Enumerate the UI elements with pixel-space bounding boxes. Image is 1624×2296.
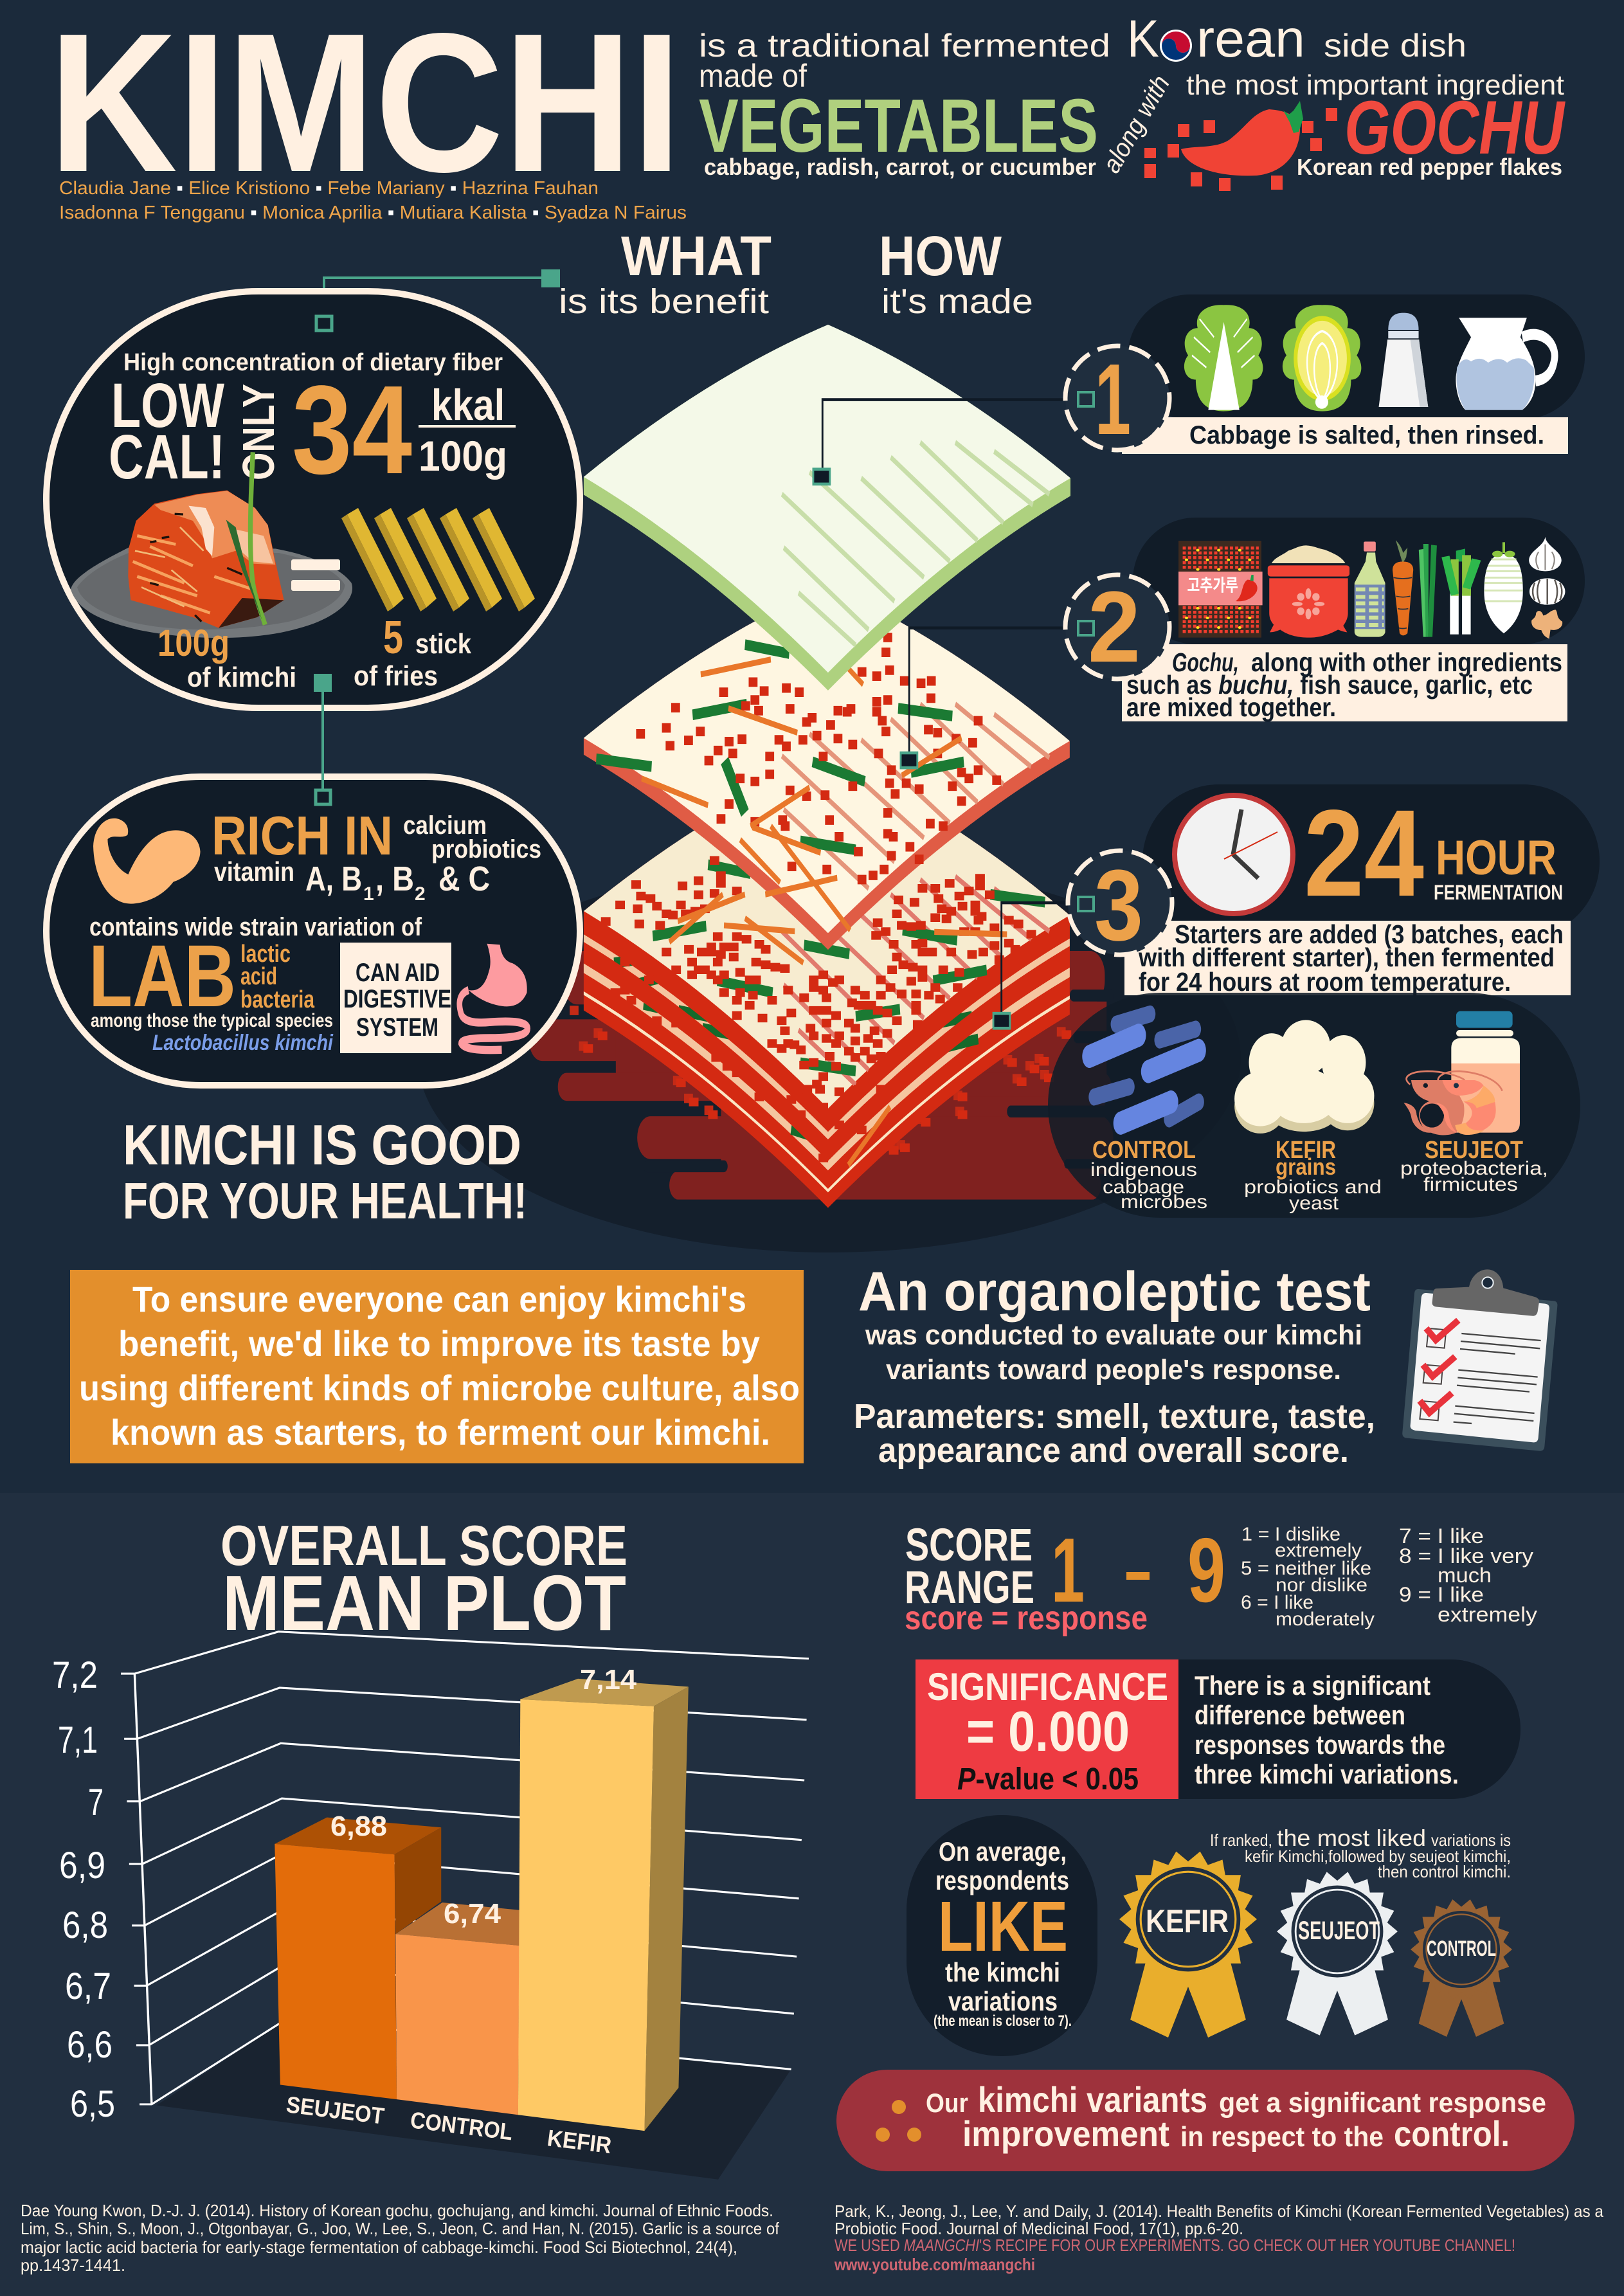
- 5 stick of fries: of fries: [354, 660, 438, 692]
- references right: WE USED MAANGCHI'S RECIPE FOR OUR EXPERIMENTS. GO CHECK OUT HER YOUTUBE CHANNEL!: [835, 2236, 1515, 2255]
- decorative dots icon: [876, 2100, 921, 2142]
- step 1 badge: [1065, 343, 1169, 456]
- icon: control microbes: [1089, 1014, 1199, 1123]
- ranking text: the most liked: [1277, 1825, 1426, 1851]
- score legend: extremely: [1275, 1540, 1362, 1561]
- icon: cabbage cross-section: [1283, 305, 1361, 411]
- authors: [59, 178, 687, 223]
- rich in heading: RICH IN: [212, 806, 393, 867]
- fiber text: High concentration of dietary fiber: [123, 349, 503, 376]
- y axis labels: 6,6: [67, 2024, 113, 2066]
- icon: leeks: [1441, 548, 1481, 635]
- score legend: extremely: [1438, 1603, 1537, 1626]
- step 2 caption: [1122, 644, 1567, 722]
- score legend: nor dislike: [1276, 1575, 1367, 1596]
- strain text: contains wide strain variation of: [89, 913, 422, 941]
- lactic acid bacteria: lactic: [240, 941, 291, 968]
- connector: layer 2 to step 2: [901, 628, 1077, 768]
- panel: like oval: On average,: [939, 1836, 1067, 1867]
- digestive callout: CAN AID: [356, 959, 440, 987]
- layer 3: fermented stack: [583, 759, 1071, 1208]
- seujeot label: SEUJEOT: [1425, 1137, 1523, 1164]
- badge: kefir: KEFIR: [1146, 1903, 1229, 1939]
- 100g of kimchi: 100g: [158, 622, 230, 664]
- vitamins: A, B: [305, 860, 362, 898]
- references left: Dae Young Kwon, D.-J. J. (2014). History of Korean gochu, gochujang, and kimchi. Journal of Ethnic Foods.: [21, 2201, 773, 2220]
- step 1 caption: [1122, 417, 1568, 454]
- kkal per 100g: [419, 381, 516, 480]
- kkal per 100g: 100g: [419, 432, 507, 480]
- conclusion banner: in respect to the: [1180, 2121, 1384, 2153]
- calcium probiotics: probiotics: [431, 835, 541, 863]
- isometric kimchi layers: [529, 325, 1119, 1208]
- ranking text: then control kimchi.: [1378, 1862, 1511, 1881]
- references right: www.youtube.com/maangchi: [834, 2255, 1035, 2274]
- panel: significance: = 0.000: [966, 1699, 1130, 1763]
- score range: SCORE: [905, 1520, 1033, 1571]
- seujeot label: proteobacteria,: [1400, 1158, 1548, 1179]
- calcium probiotics: calcium: [403, 811, 487, 840]
- y axis labels: 7,1: [58, 1719, 98, 1761]
- step 2 caption: such as buchu, fish sauce, garlic, etc: [1126, 670, 1533, 700]
- references left: pp.1437-1441.: [21, 2255, 125, 2275]
- control label: cabbage: [1103, 1177, 1184, 1198]
- hour label: HOUR: [1436, 831, 1556, 885]
- orange callout: benefit, we'd like to improve its taste by: [118, 1323, 760, 1364]
- 24 figure: 24: [1304, 784, 1424, 922]
- orange callout: using different kinds of microbe culture, also: [79, 1368, 800, 1408]
- gochu description: Korean red pepper flakes: [1297, 154, 1562, 180]
- panel: significance: responses towards the: [1195, 1730, 1445, 1760]
- category labels: KEFIR: [546, 2124, 613, 2158]
- LAB heading: LAB: [89, 927, 236, 1026]
- step 2 icons: [1178, 537, 1565, 638]
- typical species: [91, 1010, 334, 1055]
- step 3 badge: 3: [1094, 849, 1143, 962]
- conclusion banner: kimchi variants: [978, 2079, 1207, 2120]
- vitamins: 1: [363, 883, 374, 905]
- score legend: 8 = I like very: [1399, 1544, 1533, 1568]
- seujeot label: firmicutes: [1423, 1174, 1518, 1195]
- icon: gochu chili: [1144, 101, 1337, 191]
- orange callout: To ensure everyone can enjoy kimchi's: [132, 1279, 746, 1319]
- score legend: 6 = I like: [1241, 1592, 1313, 1613]
- panel: rich in: [46, 777, 580, 1085]
- intro text block: made of: [699, 58, 807, 94]
- chart floor: [157, 2019, 790, 2180]
- score range: 9: [1187, 1519, 1225, 1622]
- 34 figure: 34: [292, 359, 412, 500]
- along with: along with: [1097, 71, 1175, 177]
- badge: seujeot: [1277, 1872, 1398, 2036]
- layer 1: cabbage: [584, 325, 1070, 691]
- background: top section: [0, 0, 1624, 1493]
- orange callout: [70, 1270, 804, 1463]
- bar: seujeot: [275, 1818, 441, 2099]
- layer 2: gochu paste: [584, 586, 1070, 950]
- ground shadow: [418, 863, 1241, 1252]
- icon: clock: [1175, 795, 1293, 914]
- ranking text: If ranked,: [1210, 1830, 1272, 1850]
- score legend: 5 = neither like: [1241, 1558, 1371, 1579]
- intro text block: side dish: [1324, 28, 1466, 64]
- score range: score = response: [905, 1600, 1148, 1637]
- 5 stick of fries: 5: [383, 612, 403, 664]
- value labels: 7,14: [580, 1664, 637, 1695]
- badge: seujeot: SEUJEOT: [1298, 1917, 1380, 1945]
- lactic acid bacteria: [240, 941, 315, 1013]
- seujeot label: [1400, 1137, 1548, 1195]
- 100g of kimchi: [158, 622, 296, 693]
- authors: Claudia Jane ▪ Elice Kristiono ▪ Febe Mariany ▪ Hazrina Fauhan: [59, 178, 599, 199]
- icon: seujeot jar with shrimp: [1403, 1011, 1520, 1135]
- step 1 pill: [1065, 294, 1585, 456]
- icon: chives: [1419, 544, 1437, 637]
- 3D bar chart: [52, 1632, 809, 2180]
- intro text block: rean: [1196, 10, 1305, 68]
- panel: significance: There is a significant: [1195, 1670, 1430, 1701]
- low cal heading: LOW: [111, 370, 224, 440]
- value labels: 6,88: [330, 1811, 387, 1842]
- digestive callout: [340, 943, 451, 1053]
- step 2 caption: along with other ingredients: [1251, 647, 1562, 677]
- score range: 1: [1051, 1519, 1085, 1622]
- score range: [905, 1519, 1225, 1637]
- image: kimchi on plate: [71, 452, 352, 638]
- heading: gochu: GOCHU: [1344, 86, 1565, 170]
- conclusion banner: Our: [926, 2088, 968, 2118]
- score legend: 1 = I dislike: [1241, 1524, 1340, 1545]
- kkal per 100g: kkal: [431, 381, 505, 429]
- y axis labels: 7,2: [52, 1654, 98, 1696]
- panel: like oval: respondents: [935, 1865, 1069, 1895]
- heading: what: WHAT: [621, 225, 771, 287]
- ranking text: variations is: [1431, 1830, 1511, 1850]
- organoleptic test text: [854, 1261, 1375, 1470]
- heading: how: it's made: [881, 282, 1033, 321]
- references right: [834, 2201, 1604, 2274]
- orange callout: known as starters, to ferment our kimchi.: [111, 1412, 770, 1452]
- badge: kefir: [1119, 1852, 1257, 2038]
- icon: gochugaru package: 고추가루: [1187, 576, 1238, 595]
- step 3 caption: Starters are added (3 batches, each: [1175, 919, 1564, 949]
- vitamins: & C: [438, 860, 490, 898]
- sauce blob: [529, 951, 1114, 1200]
- conclusion banner: [836, 2070, 1574, 2171]
- category labels: [285, 2091, 613, 2158]
- icon: kefir grains: [1234, 1020, 1374, 1134]
- icon: fish sauce bottle: [1355, 541, 1385, 637]
- low cal heading: [109, 370, 225, 492]
- bar: kefir: [518, 1679, 689, 2131]
- y axis labels: 6,5: [70, 2083, 115, 2125]
- heading: how: HOW: [879, 225, 1002, 287]
- conclusion banner: improvement: [962, 2113, 1169, 2154]
- sauce gaps: [644, 990, 1119, 1172]
- equals sign: [291, 559, 340, 591]
- vitamins: , B: [375, 860, 414, 898]
- icon: radish: [1484, 542, 1523, 633]
- category labels: SEUJEOT: [285, 2091, 386, 2129]
- conclusion banner: get a significant response: [1219, 2087, 1546, 2119]
- panel: like oval: LIKE: [938, 1887, 1068, 1966]
- connector: layer 3 to step 3: [993, 903, 1077, 1028]
- icon: gochugaru package: [1178, 541, 1263, 638]
- step 1 icons: [1184, 305, 1555, 411]
- step 1 badge: 1: [1095, 343, 1131, 456]
- score legend: much: [1438, 1564, 1492, 1587]
- only label: ONLY: [233, 384, 284, 480]
- step 2 caption: are mixed together.: [1126, 692, 1336, 722]
- panel: like oval: the kimchi: [945, 1957, 1060, 1987]
- typical species: among those the typical species: [91, 1010, 333, 1031]
- icon: carrot: [1393, 540, 1413, 635]
- typical species: Lactobacillus kimchi: [152, 1031, 334, 1055]
- health statement: KIMCHI IS GOOD: [123, 1113, 521, 1177]
- score legend: 9 = I like: [1399, 1583, 1484, 1606]
- heading: what: is its benefit: [559, 282, 769, 321]
- organoleptic test text: appearance and overall score.: [878, 1431, 1349, 1470]
- icon: clipboard: [1402, 1269, 1557, 1451]
- score range: RANGE: [905, 1562, 1034, 1613]
- 5 stick of fries: stick: [415, 628, 471, 660]
- connector marker: [316, 790, 330, 804]
- conclusion banner: control.: [1394, 2113, 1510, 2154]
- chart heading: OVERALL SCORE: [221, 1514, 627, 1577]
- icon: muscle arm: [93, 818, 201, 904]
- red gochu flakes: [583, 856, 1071, 1162]
- y axis labels: 7: [88, 1782, 104, 1823]
- references right: Probiotic Food. Journal of Medicinal Food, 17(1), pp.6-20.: [835, 2219, 1243, 2238]
- 100g of kimchi: of kimchi: [187, 662, 296, 693]
- heading: vegetables: VEGETABLES: [699, 84, 1098, 168]
- organoleptic test text: An organoleptic test: [858, 1261, 1371, 1323]
- fermentation label: FERMENTATION: [1434, 881, 1563, 904]
- y axis labels: 6,8: [62, 1904, 108, 1946]
- intro text block: [699, 10, 1466, 94]
- kefir label: yeast: [1289, 1193, 1339, 1214]
- vitamins: 2: [415, 883, 426, 905]
- connector: what to low cal panel: [324, 269, 560, 316]
- panel: like oval: variations: [948, 1986, 1058, 2016]
- sauce flecks: [570, 1006, 1066, 1151]
- heading: what: [559, 225, 771, 321]
- icon: fries: [341, 508, 535, 611]
- control label: microbes: [1121, 1191, 1207, 1213]
- control label: [1090, 1137, 1207, 1213]
- kefir label: probiotics and: [1244, 1177, 1382, 1198]
- gridlines: [121, 1632, 809, 2104]
- panel: starters: [1048, 993, 1580, 1218]
- digestive callout: SYSTEM: [356, 1013, 438, 1042]
- badge: control: [1411, 1899, 1512, 2037]
- step 1 caption: Cabbage is salted, then rinsed.: [1189, 421, 1544, 449]
- vegetables list: cabbage, radish, carrot, or cucumber: [704, 154, 1096, 180]
- panel: significance: SIGNIFICANCE: [927, 1665, 1168, 1708]
- step 2 badge: 2: [1088, 571, 1141, 683]
- intro text block: is a traditional fermented: [699, 28, 1110, 64]
- icon: salt shaker: [1379, 313, 1428, 407]
- connector marker: [316, 316, 332, 330]
- kefir label: grains: [1276, 1153, 1336, 1180]
- references left: [21, 2201, 780, 2275]
- connector: low cal to rich in: [314, 674, 332, 790]
- step 3 badge: [1068, 849, 1172, 962]
- chart heading: MEAN PLOT: [222, 1559, 626, 1647]
- process steps: [1065, 294, 1600, 997]
- bar: control: [395, 1903, 519, 2115]
- panel: significance: three kimchi variations.: [1195, 1759, 1459, 1789]
- icon: stomach: [460, 944, 528, 1050]
- vitamins: vitamin: [214, 856, 294, 887]
- 5 stick of fries: [354, 612, 471, 692]
- kefir label: [1244, 1137, 1382, 1214]
- kefir label: KEFIR: [1276, 1137, 1336, 1164]
- step 2 badge: [1065, 571, 1169, 683]
- authors: Isadonna F Tengganu ▪ Monica Aprilia ▪ Mutiara Kalista ▪ Syadza N Fairus: [59, 203, 687, 223]
- step 3 caption: [1124, 919, 1571, 997]
- lactic acid bacteria: acid: [240, 963, 277, 990]
- control label: indigenous: [1090, 1159, 1197, 1180]
- ranking text: kefir Kimchi,followed by seujeot kimchi,: [1245, 1847, 1511, 1866]
- panel: significance: [916, 1659, 1520, 1799]
- y axis labels: [52, 1654, 115, 2125]
- value labels: 6,74: [444, 1898, 501, 1930]
- step 3 pill: [1068, 784, 1600, 997]
- icon: korean flag circle: [1160, 30, 1192, 62]
- heading: how: [879, 225, 1033, 321]
- health statement: FOR YOUR HEALTH!: [123, 1172, 527, 1229]
- icon: water pitcher: [1456, 318, 1555, 410]
- y axis labels: 6,9: [59, 1845, 105, 1886]
- chart heading: [221, 1514, 627, 1647]
- organoleptic test text: was conducted to evaluate our kimchi: [865, 1319, 1362, 1351]
- icon: seasoning bowl: [1268, 545, 1349, 638]
- step 3 caption: for 24 hours at room temperature.: [1139, 967, 1511, 997]
- step 3 caption: with different starter), then fermented: [1138, 943, 1555, 972]
- y axis labels: 6,7: [65, 1966, 111, 2007]
- panel: low calorie: [46, 291, 580, 708]
- low cal heading: CAL!: [109, 422, 225, 492]
- intro text block: K: [1127, 10, 1159, 68]
- step 2 caption: Gochu,: [1172, 647, 1239, 677]
- health statement: [123, 1113, 527, 1229]
- badge: control: CONTROL: [1427, 1937, 1496, 1961]
- score legend: 7 = I like: [1399, 1524, 1484, 1548]
- vitamins: [214, 856, 490, 905]
- icon: cabbage half: [1184, 305, 1263, 411]
- value labels: [330, 1664, 637, 1930]
- connector: layer 1 to step 1: [813, 400, 1077, 484]
- most important ingredient: the most important ingredient: [1186, 69, 1564, 101]
- step 2 pill: [1065, 518, 1585, 722]
- category labels: CONTROL: [409, 2106, 514, 2145]
- panel: significance: difference between: [1195, 1700, 1405, 1730]
- score legend: [1241, 1524, 1537, 1630]
- control label: CONTROL: [1092, 1137, 1196, 1164]
- ranking text: [1210, 1825, 1511, 1881]
- digestive callout: DIGESTIVE: [343, 985, 451, 1013]
- references left: Lim, S., Shin, S., Moon, J., Otgonbayar, G., Joo, W., Lee, S., Jeon, C. and Han, N. (2015). Garlic is a source of: [21, 2219, 780, 2238]
- organoleptic test text: Parameters: smell, texture, taste,: [854, 1397, 1375, 1436]
- panel: like oval: [907, 1815, 1097, 2056]
- organoleptic test text: variants toward people's response.: [886, 1354, 1341, 1386]
- score legend: moderately: [1276, 1609, 1375, 1630]
- lactic acid bacteria: bacteria: [240, 986, 315, 1013]
- references left: major lactic acid bacteria for early-stage fermentation of cabbage-kimchi. Food Sci Biotechnol, 24(4),: [21, 2237, 737, 2257]
- calcium probiotics: [403, 811, 541, 863]
- icon: garlic onion ginger: [1529, 537, 1565, 638]
- background: bottom section: [0, 1493, 1624, 2296]
- panel: like oval: (the mean is closer to 7).: [934, 2012, 1072, 2030]
- panel: significance: P-value < 0.05: [957, 1762, 1139, 1796]
